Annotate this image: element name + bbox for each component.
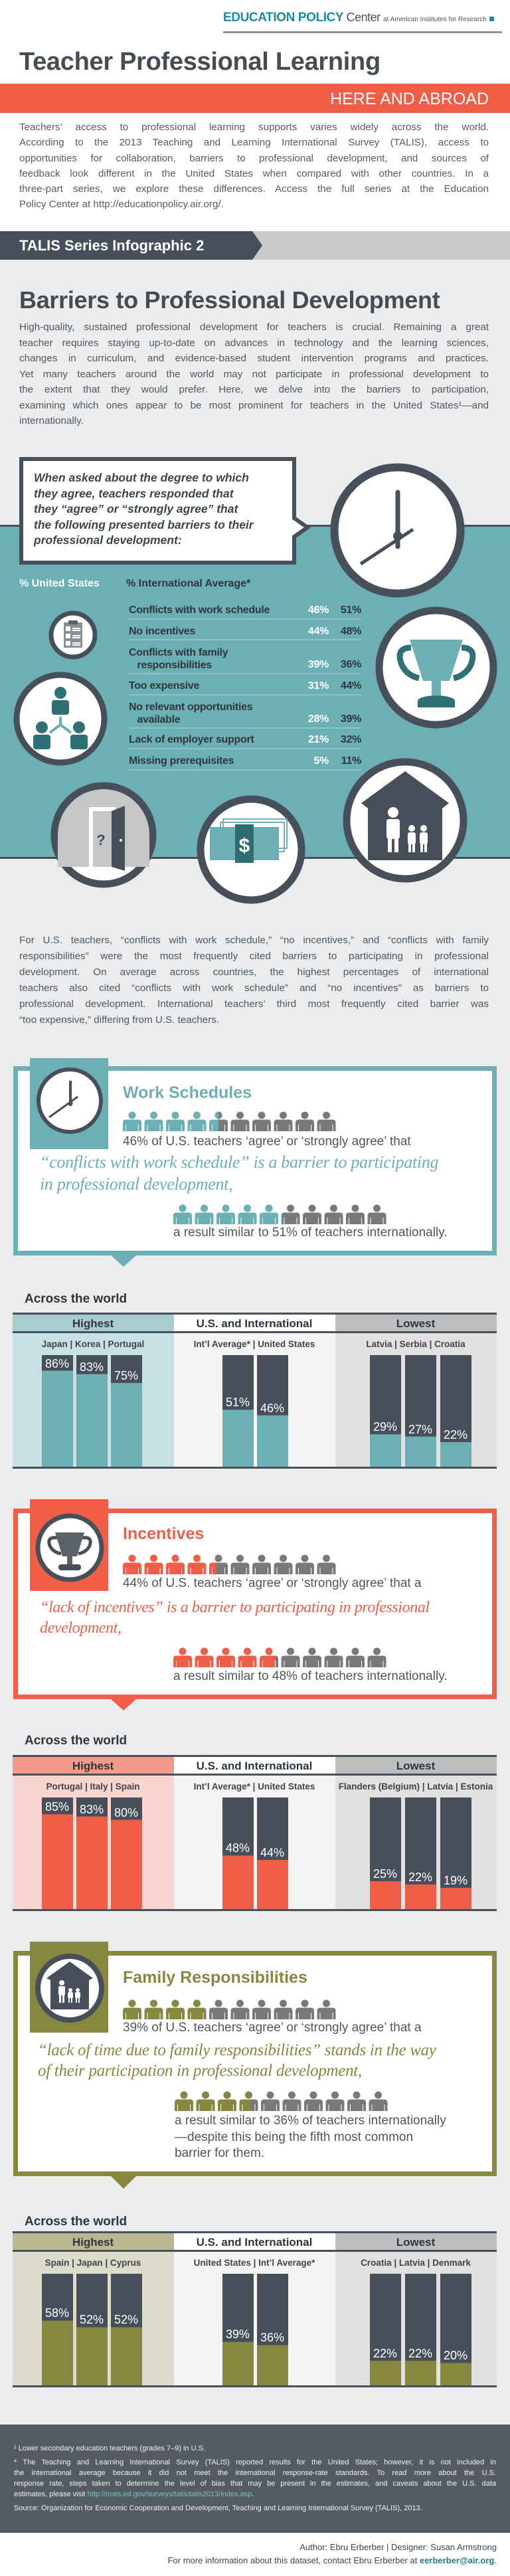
text block: summary bbox=[19, 935, 489, 1026]
chart: incentives across the world: Portugal | Italy | Spain bbox=[46, 1782, 140, 1792]
chart: incentives across the world: Lowest bbox=[396, 1760, 436, 1772]
table: barriers rows: 48% bbox=[341, 626, 361, 637]
section intro text: internationally. bbox=[19, 415, 84, 426]
table header: % United States: % United States bbox=[19, 578, 100, 589]
quote: of their participation in professional development, bbox=[38, 2062, 362, 2080]
chart: work schedules across the world: 27% bbox=[408, 1423, 432, 1436]
chart: work schedules across the world: 29% bbox=[373, 1420, 397, 1433]
label: across the world 1: Across the world bbox=[25, 1292, 127, 1306]
footer: credits bbox=[0, 2533, 510, 2576]
table: barriers rows: 44% bbox=[308, 626, 329, 637]
chart: incentives across the world: 83% bbox=[80, 1803, 104, 1816]
table: barriers rows: No incentives bbox=[129, 626, 195, 637]
chart: work schedules across the world: 51% bbox=[226, 1396, 250, 1409]
chart: family responsibilities across the world: 22% bbox=[408, 2347, 432, 2360]
intro text: According to the 2013 Teaching and Learning International Survey (TALIS), access to bbox=[19, 137, 489, 148]
table: barriers rows: Conflicts with work schedule bbox=[129, 604, 270, 616]
chart: incentives across the world: 22% bbox=[408, 1871, 432, 1884]
footer: notes band: * The Teaching and Learning International Survey (TALIS) reported results for the United States; however, it is not included in bbox=[14, 2458, 496, 2466]
label: across the world 2: Across the world bbox=[25, 1734, 127, 1748]
chart: family responsibilities across the world: 52% bbox=[80, 2313, 104, 2326]
label: across the world 3: Across the world bbox=[25, 2215, 127, 2229]
text block: summary: For U.S. teachers, “conflicts with work schedule,” “no incentives,” and “conflicts with family bbox=[19, 935, 489, 946]
text block: summary: responsibilities” were the most frequently cited barriers to participating in professional bbox=[19, 951, 489, 962]
text: 36%: barrier for them. bbox=[175, 2146, 264, 2160]
panel: incentives bbox=[13, 1499, 497, 1710]
table header: % International Average: % International Average* bbox=[126, 578, 250, 589]
footer: notes band: ¹ Lower secondary education teachers (grades 7–9) in U.S. bbox=[14, 2444, 205, 2452]
icon: team hierarchy bbox=[13, 672, 108, 765]
table: barriers rows: 11% bbox=[341, 755, 361, 767]
text block: summary: “too expensive,” differing from U.S. teachers. bbox=[19, 1014, 219, 1026]
section intro text: teacher requires staying up-to-date on advances in technology and the learning sciences, bbox=[19, 337, 489, 348]
section intro text: examining which ones appear to be most prominent for teachers in the United States¹—and bbox=[19, 400, 489, 411]
text block: summary: development. On average across countries, the highest percentages of international bbox=[19, 966, 489, 978]
chart: work schedules across the world: Japan | Korea | Portugal bbox=[42, 1339, 144, 1349]
table: barriers rows: 51% bbox=[341, 604, 361, 616]
heading: family responsibilities: Family Responsibilities bbox=[123, 1968, 307, 1987]
panel: barriers table (teal band) bbox=[0, 525, 510, 859]
callout: question prompt: they “agree” or “strongly agree” that bbox=[34, 502, 238, 515]
quote bbox=[38, 2041, 436, 2080]
quote bbox=[40, 1152, 438, 1194]
chart: family responsibilities across the world: 22% bbox=[373, 2347, 397, 2360]
icon: trophy bbox=[376, 607, 497, 728]
chart: incentives across the world: Highest bbox=[72, 1760, 114, 1772]
text: 36% bbox=[175, 2114, 446, 2160]
chart: family responsibilities across the world: Croatia | Latvia | Denmark bbox=[361, 2258, 471, 2268]
logo: Education Policy Center bbox=[223, 11, 502, 33]
chart: family responsibilities across the world: United States | Int’l Average* bbox=[194, 2258, 315, 2268]
intro text: Policy Center at http://educationpolicy.air.org/. bbox=[19, 199, 224, 210]
quote: “lack of time due to family responsibilities” stands in the way bbox=[38, 2041, 436, 2059]
section intro text: changes in curriculum, and evidence-based student intervention programs and practices. bbox=[19, 353, 489, 364]
quote: “conflicts with work schedule” is a barrier to participating bbox=[40, 1152, 438, 1172]
footer: notes band: estimates, please visit http://nces.ed.gov/surveys/talis/talis2013/index.asp. bbox=[14, 2490, 254, 2498]
chart: family responsibilities across the world: 39% bbox=[226, 2328, 250, 2341]
text: 48%: a result similar to 48% of teachers internationally. bbox=[173, 1669, 448, 1683]
table: barriers rows: available bbox=[137, 714, 180, 725]
chart: work schedules across the world: 86% bbox=[45, 1357, 69, 1370]
chart: incentives across the world: 44% bbox=[260, 1846, 284, 1859]
table: barriers rows: No relevant opportunities bbox=[129, 701, 252, 713]
section intro text: High-quality, sustained professional development for teachers is crucial. Remaining a great bbox=[19, 322, 489, 333]
footer: notes band: the international average because it did not meet the international response-rate standards. To read more about the U.S. bbox=[14, 2469, 496, 2477]
text block: summary: professional development. International teachers’ third most frequently cited barrier was bbox=[19, 998, 489, 1010]
quote bbox=[40, 1599, 430, 1637]
table: barriers rows: Missing prerequisites bbox=[129, 755, 234, 767]
chart: family responsibilities across the world: Spain | Japan | Cyprus bbox=[45, 2258, 141, 2268]
chart: incentives across the world: Flanders (Belgium) | Latvia | Estonia bbox=[339, 1782, 493, 1792]
footer: notes band bbox=[0, 2425, 510, 2533]
chart: incentives across the world: 48% bbox=[226, 1841, 250, 1855]
chart: work schedules across the world: 75% bbox=[114, 1369, 138, 1382]
logo: Education Policy Center: EDUCATION POLICY Center at American Institutes for Research bbox=[223, 11, 487, 25]
chart: work schedules across the world: 22% bbox=[444, 1428, 468, 1441]
icon: money bbox=[197, 796, 305, 903]
footer: credits: Author: Ebru Erberber | Designer: Susan Armstrong bbox=[299, 2542, 497, 2552]
table: barriers rows: 5% bbox=[313, 755, 329, 767]
chart: incentives across the world: 19% bbox=[444, 1874, 468, 1887]
section heading: Barriers to Professional Development bbox=[19, 286, 440, 314]
table: barriers rows bbox=[129, 604, 361, 771]
table: barriers rows: 39% bbox=[341, 713, 361, 725]
table: barriers rows: 31% bbox=[308, 680, 329, 691]
text: 39%: 39% of U.S. teachers ‘agree’ or ‘strongly agree’ that a bbox=[123, 2021, 422, 2035]
people chart: 39% US bbox=[123, 1999, 336, 2019]
people chart: 48% intl bbox=[173, 1647, 386, 1667]
chart: work schedules across the world: Lowest bbox=[396, 1317, 436, 1330]
table: barriers rows: 21% bbox=[308, 734, 329, 745]
callout: question prompt bbox=[19, 457, 311, 565]
chart: incentives across the world: Int’l Average* | United States bbox=[194, 1782, 315, 1792]
table: barriers rows: 44% bbox=[341, 680, 361, 691]
text block: summary: teachers also cited “conflicts with work schedule” and “no incentives” as barriers to bbox=[19, 982, 489, 994]
chart: work schedules across the world: Latvia | Serbia | Croatia bbox=[366, 1339, 466, 1349]
chart: work schedules across the world: U.S. and International bbox=[197, 1317, 312, 1330]
people chart: 36% intl bbox=[175, 2091, 388, 2111]
chart: work schedules across the world bbox=[13, 1313, 497, 1469]
chart: incentives across the world: U.S. and International bbox=[197, 1760, 312, 1772]
callout: question prompt: the following presented barriers to their bbox=[34, 518, 254, 531]
heading: incentives: Incentives bbox=[123, 1524, 204, 1543]
icon: money: $ bbox=[239, 835, 250, 857]
text: 46%: 46% of U.S. teachers ‘agree’ or ‘strongly agree’ that bbox=[123, 1135, 411, 1149]
icon: door bbox=[50, 782, 157, 887]
section intro text bbox=[19, 322, 489, 426]
text: 44%: 44% of U.S. teachers ‘agree’ or ‘strongly agree’ that a bbox=[123, 1576, 422, 1590]
subtitle band bbox=[0, 84, 510, 113]
chart: incentives across the world: 80% bbox=[114, 1806, 138, 1819]
callout: question prompt: they agree, teachers responded that bbox=[34, 486, 234, 500]
chart: incentives across the world: 25% bbox=[373, 1867, 397, 1881]
text: 36%: a result similar to 36% of teachers internationally bbox=[175, 2114, 446, 2128]
table: barriers rows: 32% bbox=[341, 734, 361, 745]
chart: incentives across the world bbox=[13, 1755, 497, 1911]
table: barriers rows: 39% bbox=[308, 659, 329, 670]
series tab bbox=[0, 231, 510, 260]
chart: family responsibilities across the world: 36% bbox=[260, 2331, 284, 2344]
chart: work schedules across the world: Highest bbox=[72, 1317, 114, 1330]
table: barriers rows: responsibilities bbox=[137, 660, 212, 671]
footer: notes band: Source: Organization for Economic Cooperation and Development, Teaching and Learning International Survey (TALIS), 2013. bbox=[14, 2504, 422, 2512]
footer: credits: For more information about this dataset, contact Ebru Erberber at eerberber@air.org. bbox=[168, 2555, 497, 2565]
chart: work schedules across the world: 46% bbox=[260, 1402, 284, 1415]
chart: work schedules across the world: 83% bbox=[80, 1360, 104, 1374]
table: barriers rows: Too expensive bbox=[129, 680, 199, 691]
section intro text: the extent that they would prefer. Here, we delve into the barriers to participation, bbox=[19, 384, 489, 395]
intro text bbox=[19, 122, 489, 210]
intro text: opportunities for collaboration, barriers to professional development, and sources of bbox=[19, 153, 489, 164]
chart: incentives across the world: 85% bbox=[45, 1800, 69, 1813]
chart: family responsibilities across the world: Lowest bbox=[396, 2236, 436, 2249]
quote: “lack of incentives” is a barrier to participating in professional bbox=[40, 1599, 430, 1616]
heading: work schedules: Work Schedules bbox=[123, 1083, 252, 1102]
table: barriers rows: Conflicts with family bbox=[129, 647, 228, 658]
chart: family responsibilities across the world: 58% bbox=[45, 2306, 69, 2320]
icon: clock bbox=[331, 464, 465, 598]
chart: family responsibilities across the world: 52% bbox=[114, 2313, 138, 2326]
icon: house with family bbox=[343, 759, 468, 882]
people chart: 46% US bbox=[123, 1112, 336, 1131]
chart: family responsibilities across the world: Highest bbox=[72, 2236, 114, 2249]
footer: notes band: response rate, steps taken to determine the level of bias that may be present in the estimates, and caveats about the U.S. data bbox=[14, 2480, 496, 2488]
table: barriers rows: 46% bbox=[308, 604, 329, 616]
table: barriers rows: Lack of employer support bbox=[129, 734, 254, 745]
section intro text: Yet many teachers around the world may not participate in professional development to bbox=[19, 368, 489, 380]
header: white top section bbox=[0, 0, 510, 231]
panel: work schedules bbox=[13, 1058, 497, 1267]
callout: question prompt: When asked about the degree to which bbox=[34, 471, 249, 484]
quote: in professional development, bbox=[40, 1174, 232, 1194]
icon: door: ? bbox=[96, 832, 106, 848]
table: barriers rows: 36% bbox=[341, 659, 361, 670]
people chart: 51% intl bbox=[173, 1205, 386, 1224]
title: Teacher Professional Learning bbox=[19, 48, 381, 76]
chart: family responsibilities across the world: 20% bbox=[444, 2349, 468, 2362]
intro text: feedback look different in the United States when compared with other countries. In a bbox=[19, 168, 489, 179]
callout: question prompt: professional development: bbox=[34, 533, 182, 547]
series tab: TALIS Series Infographic 2 bbox=[19, 237, 204, 254]
subtitle band: HERE AND ABROAD bbox=[330, 90, 489, 108]
chart: family responsibilities across the world bbox=[13, 2231, 497, 2387]
chart: work schedules across the world: Int’l Average* | United States bbox=[194, 1339, 315, 1349]
table: barriers rows: 28% bbox=[308, 713, 329, 725]
intro text: three-part series, we explore these differences. Access the full series at the Education bbox=[19, 183, 489, 195]
text: 36%: —despite this being the fifth most common bbox=[175, 2130, 413, 2144]
panel: family responsibilities bbox=[13, 1942, 497, 2189]
intro text: Teachers’ access to professional learning supports varies widely across the world. bbox=[19, 122, 489, 133]
chart: family responsibilities across the world: U.S. and International bbox=[197, 2236, 312, 2249]
quote: development, bbox=[40, 1619, 121, 1637]
icon: clipboard bbox=[49, 611, 97, 659]
text: 51%: a result similar to 51% of teachers internationally. bbox=[173, 1226, 448, 1240]
people chart: 44% US bbox=[123, 1554, 336, 1574]
